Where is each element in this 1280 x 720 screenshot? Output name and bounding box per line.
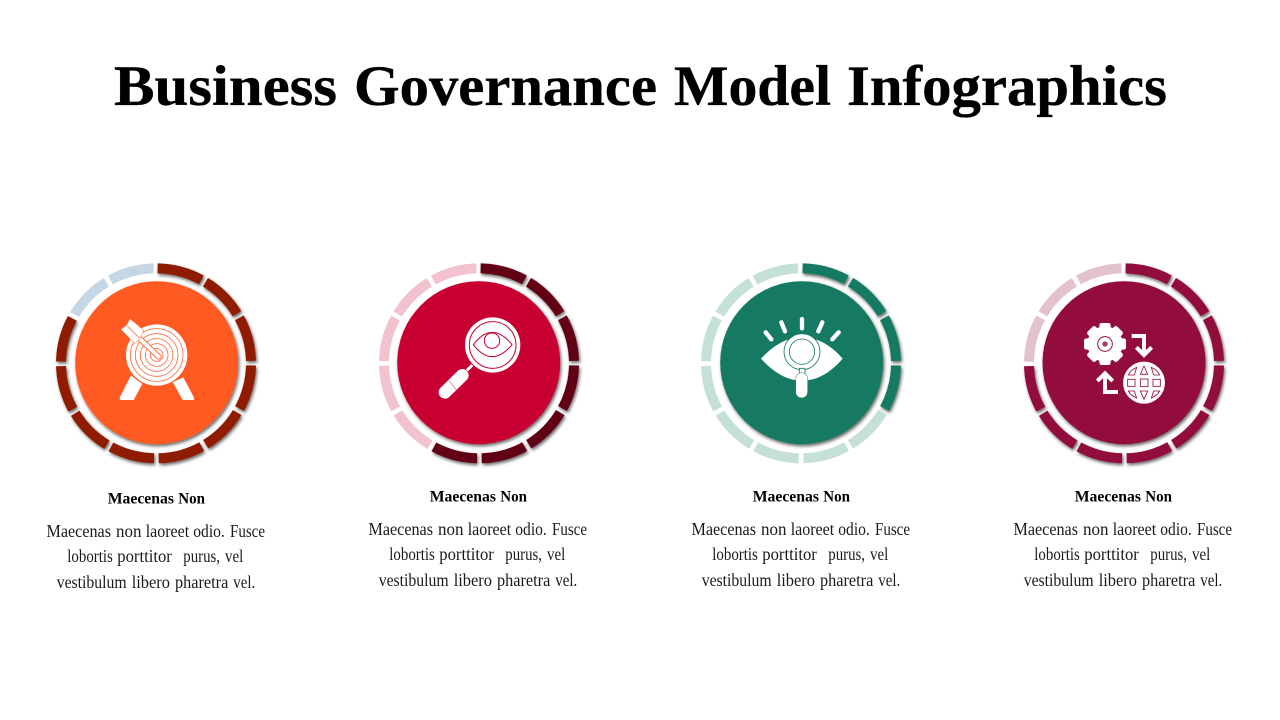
text block: vel. [555, 570, 577, 590]
progress ring: target [25, 233, 287, 494]
text block: non [116, 521, 142, 541]
text block: purus, [505, 544, 542, 564]
text block: lobortis [67, 546, 113, 566]
heading: Non [500, 488, 527, 506]
title: Business [114, 55, 337, 118]
heading: Maecenas [430, 488, 496, 506]
text block: vel [1192, 544, 1210, 564]
text block: vel. [1200, 570, 1222, 590]
text block: laoreet [791, 519, 834, 539]
icon: target with arrow [120, 319, 194, 400]
heading: Maecenas [108, 490, 174, 508]
disc: gear and globe [1042, 281, 1206, 444]
text block: Maecenas [1014, 519, 1078, 539]
text block: lobortis [389, 544, 435, 564]
text block: pharetra [1142, 570, 1196, 590]
text block: lobortis [712, 544, 758, 564]
text block: libero [454, 570, 492, 590]
text block: Maecenas [368, 519, 433, 539]
text block: vel [870, 544, 888, 564]
text block: vel [547, 544, 565, 564]
heading: Non [823, 488, 850, 506]
text block: odio. [515, 519, 547, 539]
icon: eye with magnifier [761, 319, 843, 398]
text block: non [761, 519, 787, 539]
disc: target [75, 281, 238, 444]
text block: lobortis [1034, 544, 1080, 564]
text block: Fusce [230, 521, 265, 541]
text block: vestibulum [702, 570, 772, 590]
text block: vestibulum [1024, 570, 1094, 590]
text block: laoreet [1113, 519, 1156, 539]
text block [368, 519, 587, 590]
text block: vel [225, 546, 243, 566]
text block: purus, [1150, 544, 1187, 564]
text block: vestibulum [379, 570, 449, 590]
text block: pharetra [175, 572, 229, 592]
text block: pharetra [497, 570, 551, 590]
heading: Maecenas [753, 488, 819, 506]
text block: odio. [1160, 519, 1192, 539]
text block: odio. [838, 519, 870, 539]
progress ring: magnifier [348, 233, 610, 494]
text block: Maecenas [46, 521, 111, 541]
text block: purus, [183, 546, 220, 566]
title: Governance [354, 55, 657, 118]
text block [692, 519, 910, 590]
panel: eye [670, 233, 932, 590]
text block: pharetra [820, 570, 874, 590]
text block: libero [132, 572, 170, 592]
title: Model [674, 55, 831, 118]
text block: Fusce [875, 519, 910, 539]
text block: vestibulum [57, 572, 127, 592]
icon: gear and globe exchange [1084, 323, 1165, 404]
heading: Non [1145, 488, 1172, 506]
text block: libero [1099, 570, 1137, 590]
text block: Fusce [1197, 519, 1232, 539]
text block: non [438, 519, 464, 539]
panel: gear and globe [1014, 266, 1232, 590]
text block: vel. [233, 572, 255, 592]
text block: porttitor [117, 546, 172, 566]
disc: magnifier [397, 281, 560, 444]
text block: porttitor [439, 544, 494, 564]
text block [1014, 519, 1232, 590]
text block: laoreet [468, 519, 511, 539]
heading: Maecenas [1075, 488, 1141, 506]
icon: magnifier with eye [445, 317, 520, 392]
text block: Fusce [552, 519, 587, 539]
text block: non [1083, 519, 1109, 539]
text block: porttitor [762, 544, 817, 564]
text block: porttitor [1084, 544, 1139, 564]
text block: laoreet [146, 521, 189, 541]
text block: Maecenas [692, 519, 756, 539]
progress ring: gear and globe [1027, 266, 1221, 461]
text block: purus, [828, 544, 865, 564]
heading: Non [178, 490, 205, 508]
text block [46, 521, 265, 592]
text block: vel. [878, 570, 900, 590]
panel: magnifier [348, 233, 610, 590]
text block: libero [777, 570, 815, 590]
panel: target [25, 233, 287, 592]
disc: eye [720, 281, 883, 444]
text block: odio. [193, 521, 225, 541]
progress ring: eye [670, 233, 932, 494]
title: Infographics [847, 55, 1167, 118]
